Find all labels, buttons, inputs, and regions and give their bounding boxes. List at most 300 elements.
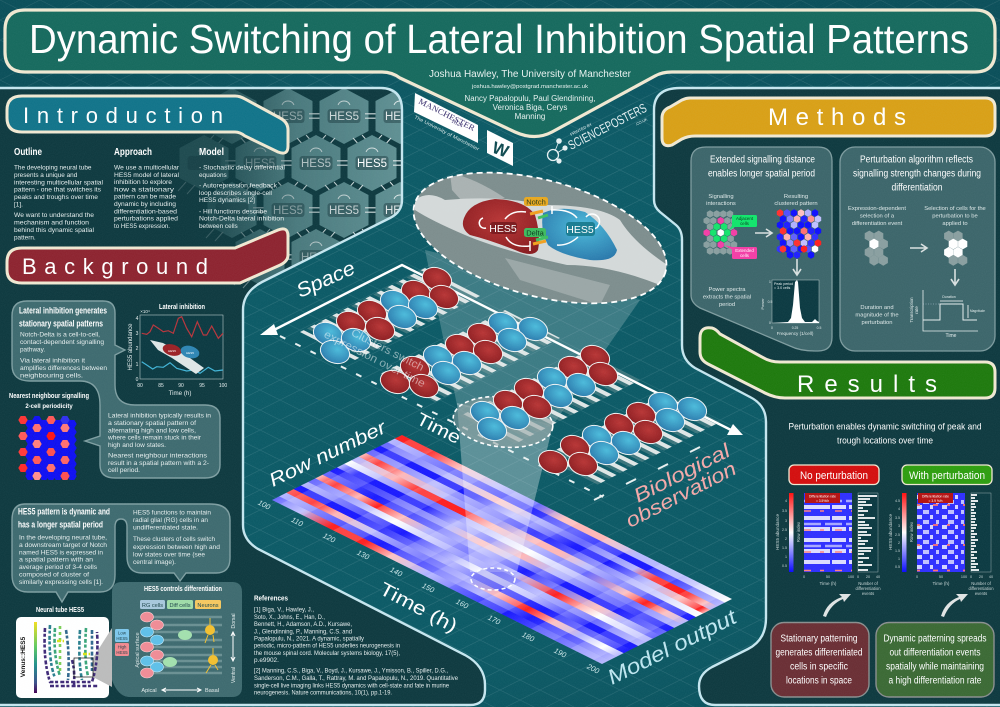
panel: extended signalling distance: Power spectra	[708, 287, 746, 293]
logo: Science Posters	[548, 100, 649, 164]
callout: lateral inhibition generates stationary spatial patterns: Via lateral inhibition it	[20, 358, 85, 364]
panel: perturbation algorithm: selection of a	[860, 214, 895, 220]
chart: with perturbation heatmap and histogram: 20	[979, 575, 983, 579]
results headline: trough locations over time	[837, 436, 933, 446]
logo: University of Manchester: 1824	[450, 118, 464, 129]
chip: with perturbation: With perturbation	[909, 470, 985, 482]
chart: no perturbation heatmap and histogram: 2.5	[782, 528, 787, 532]
references: the mouse spinal cord. Molecular systems biology, 17(5),	[254, 650, 400, 657]
panel: perturbation algorithm: differentiation	[892, 182, 942, 194]
chart: no perturbation heatmap and histogram: 0	[857, 575, 859, 579]
chart: with perturbation heatmap and histogram: 0	[916, 575, 918, 579]
hexagon signalling network behind introduction: HES5	[245, 158, 275, 170]
hex group: perturbed cells	[944, 231, 967, 266]
chart: with perturbation heatmap and histogram: 3.5	[895, 516, 900, 520]
magnified cell pair in dashed ellipse: HES5	[489, 223, 517, 235]
chart: no perturbation heatmap and histogram: 1	[785, 555, 787, 559]
step chart: perturbation profile: rate	[914, 306, 919, 314]
panel: extended signalling distance: Resulting	[784, 194, 808, 200]
callout: stationary patterning	[771, 622, 869, 697]
chart: with perturbation heatmap and histogram: 1	[898, 557, 900, 561]
text block: outline: [1].	[14, 202, 23, 208]
text block: outline: pattern - one that switches its	[14, 187, 101, 194]
chart: with perturbation heatmap and histogram: 3	[898, 524, 900, 528]
panel: extended signalling distance	[691, 147, 832, 351]
diagram: HES5 controls differentiation: HES5	[116, 650, 128, 655]
power spectrum chart: 0.5	[768, 300, 772, 304]
logo: University of Manchester: The University of Manchester	[413, 114, 480, 153]
diagram: HES5 controls differentiation: Dorsal	[231, 614, 237, 628]
label: model output: Model output	[604, 605, 742, 689]
callout: lateral inhibition generates stationary spatial patterns: contact-dependent signalling	[20, 339, 104, 346]
diagram: HES5 controls differentiation: HES5	[116, 636, 128, 641]
image: neural tube HES5: Venus::HES5	[20, 636, 27, 677]
hexagon signalling network behind introduction: HES5	[273, 205, 303, 217]
chart: no perturbation heatmap and histogram: = 3.5%/h	[816, 499, 829, 503]
chart: with perturbation heatmap and histogram: 2.5	[895, 533, 900, 537]
arrow: to with perturbation	[941, 594, 968, 617]
references: neurogenesis. Nature communications, 10(1), pp.1-19.	[254, 690, 392, 697]
hexagon grid: nearest neighbour signalling 2-cell periodicity: 2-cell periodicity	[25, 404, 73, 410]
chart: no perturbation heatmap and histogram: 1.5	[782, 546, 787, 550]
hexagon signalling network behind introduction: HES5	[301, 158, 331, 170]
callout: HES5 pattern is dynamic and has a longer spatial period: a spatial pattern with an	[19, 557, 93, 564]
label: space: Space	[293, 257, 359, 303]
background heading	[7, 229, 288, 283]
references: Soto, X., Johns, E., Han, D.,	[254, 614, 325, 621]
text block: outline: Outline	[14, 146, 42, 158]
panel: extended signalling distance: Signalling	[708, 194, 734, 200]
text block: model: loop describes single-cell	[199, 190, 272, 197]
chart: with perturbation heatmap and histogram: = 3.9 %/h	[928, 499, 943, 503]
panel: extended signalling distance: interactions	[706, 201, 736, 207]
callout: lateral inhibition generates stationary spatial patterns: Lateral inhibition typically results in	[108, 412, 211, 420]
panel: perturbation algorithm: Expression-dependent	[848, 206, 906, 212]
time axis tick labels: 130	[356, 548, 371, 562]
text block: model	[199, 146, 285, 230]
panel: perturbation algorithm: Perturbation algorithm reflects	[860, 154, 973, 166]
axes arrows: space and time	[260, 265, 743, 435]
chart: with perturbation heatmap and histogram	[888, 493, 994, 596]
hexagon signalling network behind introduction: HES5	[273, 111, 303, 123]
callout: lateral inhibition generates stationary spatial patterns: high and low states.	[108, 442, 166, 449]
panel: left dark column	[0, 88, 485, 705]
callout: HES5 pattern is dynamic and has a longer spatial period: These clusters of cells switch	[133, 536, 215, 543]
line chart: lateral inhibition: 3	[136, 331, 139, 337]
text block: approach: how a stationary	[114, 186, 175, 193]
callout: lateral inhibition generates stationary spatial patterns: amplifies differences between	[20, 365, 107, 372]
diagram: HES5 controls differentiation: Low	[118, 630, 127, 636]
logo: Science Posters: .CO.UK	[635, 117, 649, 127]
text block: outline: behind this dynamic spatial	[14, 227, 94, 234]
callout: HES5 pattern is dynamic and has a longer spatial period: radial glial (RG) cells in an	[133, 517, 208, 524]
methods heading	[662, 98, 995, 146]
cell clusters	[310, 264, 710, 479]
hexagon grid: nearest neighbour signalling 2-cell periodicity	[9, 391, 89, 480]
hexagon signalling network behind introduction: HES5	[301, 252, 331, 264]
line chart: lateral inhibition: 85	[158, 383, 164, 389]
step chart: perturbation profile	[909, 290, 985, 339]
chart: no perturbation heatmap and histogram: 20	[866, 575, 870, 579]
text block: model: equations	[199, 172, 227, 179]
callout: lateral inhibition generates stationary spatial patterns: alternating high and low cells,	[108, 427, 196, 434]
chart: no perturbation heatmap and histogram: 2	[785, 537, 787, 541]
text block: approach: pattern can be made	[114, 194, 176, 201]
references: [2] Manning, C.S., Biga, V., Boyd, J., Kursawe, J., Ymisson, B., Spiller, D.G.,	[254, 668, 448, 674]
step chart: perturbation profile: Transcription	[909, 297, 914, 323]
dashed ellipse on heatmap	[471, 568, 515, 590]
panel: extended signalling distance: period	[719, 302, 735, 308]
text block: outline: pattern.	[14, 234, 36, 242]
callout: HES5 pattern is dynamic and has a longer spatial period: central image).	[133, 559, 176, 566]
chart: with perturbation heatmap and histogram: differentiation	[968, 586, 994, 591]
chip: no perturbation	[789, 465, 879, 484]
line chart: lateral inhibition: 95	[199, 383, 205, 389]
line chart: lateral inhibition: 0	[136, 377, 139, 383]
callout: lateral inhibition generates stationary spatial patterns: Lateral inhibition generates	[19, 306, 107, 316]
chart: with perturbation heatmap and histogram: Time (h)	[933, 581, 950, 586]
label: row number: Row number	[266, 417, 390, 492]
panel: perturbation algorithm: Duration and	[860, 305, 894, 311]
text block: approach: inhibition to explore	[114, 179, 172, 186]
callout: HES5 pattern is dynamic and has a longer spatial period: low states over time (see	[133, 552, 205, 558]
chart: no perturbation heatmap and histogram: 4	[785, 499, 787, 503]
chip: with perturbation	[902, 465, 992, 484]
power spectrum chart: Frequency (1/cell)	[777, 331, 814, 336]
results headline	[788, 422, 982, 446]
chart: isometric model output heatmap	[272, 435, 732, 664]
chart: with perturbation heatmap and histogram: 4.5	[895, 499, 900, 503]
callout: dynamic patterning: spatially while maintaining	[886, 662, 984, 672]
diagram: HES5 controls differentiation	[112, 582, 242, 697]
background heading: Background	[22, 254, 208, 279]
label: time (h): Time (h)	[376, 579, 461, 637]
chart: with perturbation heatmap and histogram: 1.5	[895, 549, 900, 553]
time axis tick labels: 160	[455, 597, 470, 611]
chart: no perturbation heatmap and histogram: 0	[803, 575, 805, 579]
chart: with perturbation heatmap and histogram: events	[975, 591, 987, 596]
callout: HES5 pattern is dynamic and has a longer spatial period: expression between high and	[133, 544, 220, 551]
label: biological observation: Biological	[630, 440, 734, 507]
line chart: lateral inhibition: Lateral inhibition	[159, 302, 205, 311]
logo: University of Manchester	[413, 93, 480, 153]
magnified cell pair in dashed ellipse: Delta	[526, 228, 545, 238]
panel: extended signalling distance: cells	[740, 253, 750, 258]
diagram: HES5 controls differentiation: High	[118, 644, 127, 650]
references: Papalopulu, N., 2021. A dynamic, spatially	[254, 636, 365, 642]
power spectrum chart: Peak period	[774, 282, 793, 286]
results heading: Results	[797, 371, 937, 398]
chart: with perturbation heatmap and histogram: 2	[898, 541, 900, 545]
callout: lateral inhibition generates stationary spatial patterns: neighbouring cells.	[20, 372, 83, 380]
biological observation sheet: cell process stubs	[280, 268, 720, 500]
chart: with perturbation heatmap and histogram: 100	[961, 575, 967, 579]
callout: HES5 pattern is dynamic and has a longer spatial period: named HES5 is expressed in	[19, 549, 103, 556]
hex diagram: signalling interactions	[704, 210, 737, 255]
text block: approach: dynamic by including	[114, 201, 176, 208]
text block: outline: mechanism and function	[14, 220, 89, 226]
logo: Science Posters: SCIENCEPOSTERS	[566, 100, 649, 153]
text block: approach	[114, 146, 180, 230]
references: single-cell live imaging links HES5 dynamics with cell-state and fate in murine	[254, 682, 449, 689]
text block: model: HES5 dynamics [2]	[199, 197, 255, 204]
text block: approach: to HES5 expression.	[114, 223, 170, 230]
power spectrum chart: 1	[769, 280, 771, 284]
references: p.e9902.	[254, 657, 279, 664]
chart: with perturbation heatmap and histogram: 40	[989, 575, 993, 579]
time axis tick labels: 110	[290, 515, 305, 529]
line chart: lateral inhibition: ×10⁴	[140, 309, 150, 314]
panel: perturbation algorithm: perturbation to be	[932, 214, 978, 220]
authors: Joshua Hawley, The University of Manchester	[429, 69, 632, 80]
logo: Wellcome: W	[490, 138, 512, 162]
text block: approach: perturbations applied	[114, 216, 178, 223]
power spectrum chart: 0.5	[817, 326, 821, 330]
chart: no perturbation heatmap and histogram: differentiation	[855, 586, 881, 591]
power spectrum chart: = 3.0 cells	[774, 286, 790, 290]
callout: dynamic patterning: a high differentiation rate	[888, 676, 982, 686]
text block: outline: The developing neural tube	[14, 164, 92, 172]
authors: Veronica Biga, Cerys	[493, 103, 567, 112]
step chart: perturbation profile: Magnitude	[970, 309, 985, 313]
panel: extended signalling distance: cells	[740, 221, 750, 226]
dashed ellipse on sheet	[451, 392, 555, 452]
panel: extended signalling distance: Adjacent	[736, 216, 754, 221]
overlay text: clusters switch expression over time: Clusters switch	[349, 327, 426, 374]
line chart: lateral inhibition: Time (h)	[169, 390, 191, 397]
references: periodic, micro-pattern of HES5 underlies neurogenesis in	[254, 643, 400, 650]
diagram: HES5 controls differentiation: RG cells	[142, 603, 163, 609]
time axis tick labels: 190	[553, 646, 568, 660]
label: biological observation	[622, 440, 740, 532]
callout: stationary patterning: generates differentiated	[776, 648, 862, 658]
panel: perturbation algorithm: differentiation event	[852, 221, 903, 227]
callout: lateral inhibition generates stationary spatial patterns	[12, 301, 220, 478]
text block: outline: We want to understand the	[14, 212, 94, 219]
chart: with perturbation heatmap and histogram: 0	[970, 575, 972, 579]
callout: lateral inhibition generates stationary spatial patterns: result in a spatial pattern with a 2-	[108, 460, 209, 467]
text block: approach: differentiation-based	[114, 208, 177, 215]
label: biological observation: observation	[622, 458, 740, 532]
power spectrum chart: 0.25	[792, 326, 798, 330]
image: neural tube HES5	[16, 605, 112, 698]
panel: perturbation algorithm: applied to	[942, 221, 968, 227]
diagram: HES5 controls differentiation: Apical surface	[135, 632, 141, 668]
panel: perturbation algorithm: Selection of cells for the	[924, 206, 986, 212]
magnified cell pair in dashed ellipse: HES5	[566, 224, 594, 236]
chart: no perturbation heatmap and histogram: 100	[848, 575, 854, 579]
chart: with perturbation heatmap and histogram: Number of	[971, 581, 992, 586]
diagram: HES5 controls differentiation: Apical	[141, 688, 157, 694]
introduction heading: Introduction	[23, 103, 223, 128]
line chart: lateral inhibition: 4	[136, 316, 139, 322]
chart: no perturbation heatmap and histogram: 50	[826, 575, 830, 579]
panel: right dark column	[654, 88, 1000, 705]
time axis tick labels: 180	[521, 630, 536, 644]
callout: HES5 pattern is dynamic and has a longer spatial period: similarly expressing cells [1].	[19, 579, 103, 586]
chart: no perturbation heatmap and histogram: Time (h)	[820, 581, 837, 586]
results heading	[700, 328, 995, 398]
time axis tick labels: 100	[257, 498, 272, 512]
text block: approach: We use a multicellular	[114, 164, 180, 172]
panel: extended signalling distance: enables longer spatial period	[708, 168, 815, 180]
chart: with perturbation heatmap and histogram: 0.5	[895, 565, 900, 569]
references: J., Glendinning, P., Manning, C.S. and	[254, 628, 352, 636]
line chart: lateral inhibition: HES5 abundance	[128, 323, 134, 371]
hex group: selected cell	[865, 231, 888, 266]
power spectrum chart	[760, 280, 821, 336]
hexagon signalling network behind introduction: HES5	[329, 205, 359, 217]
chart: no perturbation heatmap and histogram: Number of	[858, 581, 879, 586]
references: Bennett, H., Adamson, A.D., Kursawe,	[254, 621, 352, 628]
callout: lateral inhibition generates stationary spatial patterns: stationary spatial patterns	[19, 318, 103, 328]
authors: Manning	[515, 112, 545, 121]
panel: perturbation algorithm: magnitude of the	[855, 312, 899, 318]
chart: with perturbation heatmap and histogram: HES5 abundance	[888, 514, 893, 550]
callout: HES5 pattern is dynamic and has a longer spatial period: average period of 3-4 cells	[19, 564, 97, 571]
line chart: lateral inhibition: 100	[219, 383, 227, 389]
chart: no perturbation heatmap and histogram: 0.5	[782, 564, 787, 568]
text block: approach: HES5 model of lateral	[114, 172, 179, 179]
panel: extended signalling distance: Extended	[735, 248, 754, 253]
references: Sanderson, C.M., Galla, T., Rattray, M. and Papalopulu, N., 2019. Quantitative	[254, 675, 458, 682]
magnified cell pair in dashed ellipse: Notch	[526, 198, 546, 206]
title banner	[5, 10, 995, 136]
magnified cell pair in dashed ellipse	[412, 172, 668, 304]
hexagon signalling network behind introduction: HES5	[329, 111, 359, 123]
logo: Wellcome	[487, 130, 513, 166]
callout: HES5 pattern is dynamic and has a longer spatial period: HES5 pattern is dynamic and	[18, 506, 110, 516]
step chart: perturbation profile: Time	[946, 333, 957, 339]
chart: with perturbation heatmap and histogram: 4	[898, 507, 900, 511]
methods heading: Methods	[768, 104, 906, 131]
hexagon signalling network behind introduction: HES5	[385, 111, 415, 123]
time axis tick labels: 120	[322, 531, 337, 545]
power spectrum chart: Power	[760, 298, 765, 310]
diagram: HES5 controls differentiation: Basal	[205, 688, 219, 694]
callout: stationary patterning: Stationary patterning	[780, 634, 858, 644]
line chart: lateral inhibition	[128, 302, 227, 397]
arrow: to no perturbation	[823, 594, 851, 617]
chart: no perturbation heatmap and histogram: Row index	[796, 521, 801, 542]
callout: stationary patterning: cells in specific	[790, 662, 848, 672]
callout: lateral inhibition generates stationary spatial patterns: a stationary spatial pattern of	[108, 420, 196, 427]
line chart: lateral inhibition: 90	[178, 383, 184, 389]
step chart: perturbation profile: Duration	[942, 295, 956, 299]
callout: HES5 pattern is dynamic and has a longer spatial period: In the developing neural tube,	[19, 534, 107, 542]
diagram: HES5 controls differentiation: Ventral	[231, 667, 237, 683]
chart: no perturbation heatmap and histogram: HES5 abundance	[775, 514, 780, 550]
overlay text: clusters switch expression over time: expression over time	[322, 329, 427, 390]
text block: model: - Stochastic delay differential	[199, 164, 285, 172]
callout: dynamic patterning	[876, 622, 994, 697]
diagram: HES5 controls differentiation: HES5 controls differentiation	[144, 586, 222, 593]
references: References	[254, 594, 288, 602]
chart: no perturbation heatmap and histogram: Differentiation rate	[809, 494, 836, 498]
image: neural tube HES5: Neural tube HES5	[36, 605, 84, 614]
line chart: lateral inhibition: HES5	[168, 349, 176, 353]
callout: HES5 pattern is dynamic and has a longer spatial period	[12, 504, 230, 602]
callout: HES5 pattern is dynamic and has a longer spatial period: composed of cluster of	[19, 571, 89, 578]
label: time: Time	[413, 409, 464, 448]
hexagon signalling network behind introduction: HES5	[357, 158, 387, 170]
authors	[429, 69, 632, 121]
time axis tick labels: 140	[389, 565, 404, 579]
callout: lateral inhibition generates stationary spatial patterns: Nearest neighbour interactions	[108, 452, 207, 460]
callout: lateral inhibition generates stationary spatial patterns: pathway.	[20, 346, 45, 354]
text block: outline	[14, 146, 103, 242]
time axis tick labels	[257, 498, 601, 676]
authors: joshua.hawley@postgrad.manchester.ac.uk	[471, 84, 588, 90]
chart: with perturbation heatmap and histogram: 50	[939, 575, 943, 579]
line chart: lateral inhibition: 2	[136, 346, 139, 352]
callout: lateral inhibition generates stationary spatial patterns: Notch-Delta is a cell-to-cell,	[20, 332, 100, 338]
callout: lateral inhibition generates stationary spatial patterns: where cells remain stuck in their	[107, 435, 202, 442]
chart: no perturbation heatmap and histogram: 40	[876, 575, 880, 579]
diagram: HES5 controls differentiation: Diff cells	[169, 603, 191, 609]
text block: outline: peaks and troughs over time	[14, 194, 98, 201]
chart: no perturbation heatmap and histogram: 3.5	[782, 509, 787, 513]
hexagon signalling network behind introduction	[178, 89, 401, 288]
line chart: lateral inhibition: HES5	[186, 351, 194, 355]
text block: model: - Autorepression feedback	[199, 182, 278, 190]
time axis tick labels: 150	[421, 581, 436, 595]
text block: model: Notch-Delta lateral inhibition	[199, 216, 284, 223]
chart: with perturbation heatmap and histogram: Differentiation rate	[922, 494, 949, 498]
callout: HES5 pattern is dynamic and has a longer spatial period: has a longer spatial period	[18, 520, 103, 530]
time axis tick labels: 200	[585, 661, 601, 676]
chart: no perturbation heatmap and histogram	[775, 493, 881, 596]
callout: dynamic patterning: out differentiation events	[890, 648, 980, 658]
callout: HES5 pattern is dynamic and has a longer spatial period: HES5 functions to maintain	[133, 510, 211, 516]
left column outline	[0, 88, 485, 705]
power spectrum chart: 0	[771, 326, 773, 330]
text block: model: between cells	[199, 223, 238, 230]
references	[254, 594, 458, 697]
hexagon signalling network behind introduction: HES5	[385, 205, 415, 217]
line chart: lateral inhibition: 1	[136, 362, 139, 368]
text block: outline: interesting multicellular spatial	[14, 179, 103, 186]
callout: lateral inhibition generates stationary spatial patterns: cell period.	[108, 467, 140, 474]
text block: outline: presents a unique and	[14, 172, 78, 179]
text block: model: Model	[199, 146, 224, 158]
logo: Science Posters: PRINTED BY	[569, 121, 593, 137]
light beam connecting biology to model output	[425, 250, 640, 572]
authors: Nancy Papalopulu, Paul Glendinning,	[464, 94, 596, 103]
time axis tick labels: 170	[487, 613, 502, 627]
chart: no perturbation heatmap and histogram: 3	[785, 519, 787, 523]
diagram: HES5 controls differentiation: Neurons	[197, 603, 219, 609]
chart: with perturbation heatmap and histogram: Row index	[909, 521, 914, 542]
panel: extended signalling distance: Extended signalling distance	[710, 154, 815, 166]
callout: HES5 pattern is dynamic and has a longer spatial period: a downstream target of Notch	[19, 542, 107, 549]
hexagon grid: nearest neighbour signalling 2-cell periodicity: Nearest neighbour signalling	[9, 391, 89, 400]
chip: no perturbation: No perturbation	[800, 470, 868, 482]
panel: perturbation algorithm: perturbation	[862, 320, 892, 326]
panel: extended signalling distance: clustered pattern	[774, 201, 818, 207]
logo: University of Manchester: MANCHESTER	[417, 97, 477, 133]
hex diagram: clustered pattern	[777, 209, 821, 259]
text block: model: - Hill functions describe	[199, 208, 267, 215]
text block: approach: Approach	[114, 146, 152, 158]
chart: no perturbation heatmap and histogram: events	[862, 591, 874, 596]
panel: extended signalling distance: extracts the spatial	[703, 294, 751, 300]
references: [1] Biga, V., Hawley, J.,	[254, 606, 314, 614]
introduction heading	[7, 96, 288, 153]
callout: HES5 pattern is dynamic and has a longer spatial period: undifferentiated state.	[133, 524, 198, 532]
line chart: lateral inhibition: 80	[137, 383, 143, 389]
panel: perturbation algorithm	[840, 147, 995, 351]
